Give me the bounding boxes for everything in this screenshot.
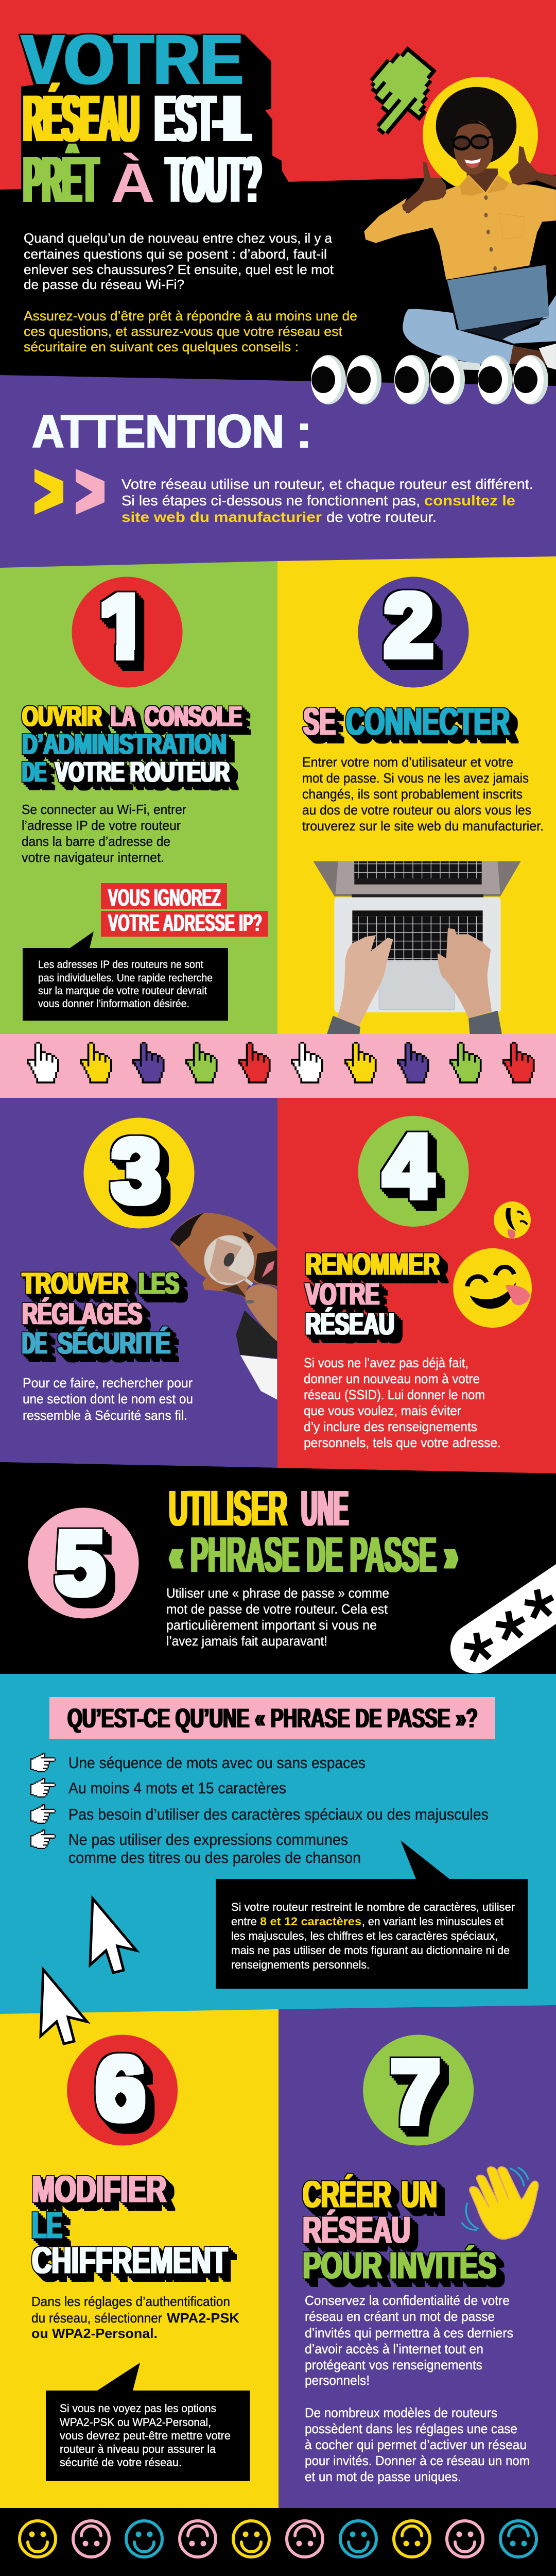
step 5 heading: UTILISER bbox=[169, 1480, 287, 1536]
step 6 text: WPA2-PSK bbox=[167, 2310, 239, 2326]
intro paragraph yellow: sécuritaire en suivant ces quelques conseils : bbox=[24, 339, 299, 354]
panel: step 3 background purple bbox=[0, 1098, 277, 1474]
step 1 text bbox=[22, 802, 186, 865]
title block: EST-IL bbox=[155, 82, 251, 156]
step 7 text bbox=[305, 2293, 530, 2484]
step 3 number badge bbox=[83, 1118, 195, 1228]
step 7 text: d’invités qui permettra à ces derniers bbox=[305, 2325, 513, 2341]
icon: large smiling emoji bbox=[453, 1248, 532, 1328]
step 4 heading: RENOMMER bbox=[305, 1247, 440, 1281]
step 7 heading: RÉSEAU bbox=[303, 2210, 410, 2251]
icon: green pointing hand cursor bbox=[348, 41, 451, 147]
step 1 heading: CONSOLE bbox=[145, 700, 242, 732]
step 2 number badge: 2 bbox=[384, 575, 434, 676]
attention text bbox=[121, 476, 533, 525]
callout: vous ignorez votre adresse IP: VOUS IGNOREZ bbox=[108, 884, 221, 911]
photo: man with magnifying glass bbox=[170, 1213, 277, 1400]
panel: step 7 background purple bbox=[279, 2005, 556, 2508]
list: passphrase rules: Au moins 4 mots et 15 caractères bbox=[68, 1779, 286, 1797]
callout: router restriction speech bubble: Si votre routeur restreint le nombre de caractères, utiliser bbox=[231, 1901, 515, 1913]
title block: TOUT? bbox=[166, 143, 262, 216]
step 7 heading: UN bbox=[402, 2174, 437, 2215]
callout: WPA2 speech bubble: WPA2-PSK ou WPA2-Personal, bbox=[60, 2416, 211, 2429]
callout: WPA2 speech bubble bbox=[46, 2363, 250, 2481]
callout: WPA2 speech bubble: routeur à niveau pour assurer la bbox=[60, 2443, 216, 2455]
step 1 heading: D’ADMINISTRATION bbox=[22, 728, 227, 760]
icon: pointing hands bbox=[30, 1753, 56, 1849]
step 7 heading: CRÉER bbox=[303, 2174, 391, 2215]
title line 3: À bbox=[111, 151, 155, 214]
step 5 text bbox=[166, 1585, 389, 1649]
intro paragraph bbox=[24, 230, 334, 292]
yellow halo bbox=[423, 77, 538, 192]
callout: router restriction speech bubble: renseignements personnels. bbox=[231, 1958, 370, 1971]
step 2 number badge bbox=[358, 575, 468, 687]
icon: arrow cursor one bbox=[90, 1899, 136, 1973]
panel: step 2 background yellow bbox=[277, 556, 556, 1034]
step 7 text: De nombreux modèles de routeurs bbox=[305, 2405, 497, 2420]
step 3 number badge: 3 bbox=[111, 1121, 162, 1222]
callout: WPA2 speech bubble: Si vous ne voyez pas les options bbox=[60, 2402, 216, 2415]
step 7 number badge: 7 bbox=[390, 2042, 441, 2143]
step 4 number badge bbox=[358, 1116, 468, 1227]
step 2 heading: SE bbox=[303, 700, 336, 743]
step 4 number badge: 4 bbox=[383, 1116, 433, 1217]
intro paragraph: de passe du réseau Wi-Fi? bbox=[24, 277, 184, 292]
attention text: Si les étapes ci-dessous ne fonctionnent pas, bbox=[121, 493, 420, 509]
callout: black speech bubble: pas individuelles. Une rapide recherche bbox=[38, 972, 213, 984]
step 5 heading: UNE bbox=[301, 1480, 349, 1536]
step 3 heading: SÉCURITÉ bbox=[58, 1327, 170, 1360]
panel: step 4 background red bbox=[277, 1098, 556, 1479]
intro paragraph yellow bbox=[24, 308, 357, 354]
panel: step 1 background green bbox=[0, 561, 277, 1034]
attention text: consultez le bbox=[424, 493, 515, 509]
step 6 heading: CHIFFREMENT bbox=[32, 2240, 228, 2281]
icon: hand cursor row bbox=[27, 1042, 535, 1083]
step 2 text bbox=[302, 754, 544, 834]
step 1 number badge: 1 bbox=[98, 577, 149, 677]
step 6 text bbox=[31, 2294, 239, 2341]
callout: router restriction speech bubble: entre bbox=[231, 1915, 257, 1928]
callout: router restriction speech bubble: , en variant les minuscules et bbox=[362, 1915, 503, 1928]
callout: vous ignorez votre adresse IP: VOTRE ADRESSE IP? bbox=[108, 909, 262, 936]
step 1 text: votre navigateur internet. bbox=[22, 850, 164, 865]
step 2 text: trouverez sur le site web du manufacturier. bbox=[302, 818, 544, 834]
list: passphrase rules: Ne pas utiliser des expressions communes bbox=[68, 1831, 348, 1849]
intro paragraph: certaines questions qui se posent : d’abord, faut-il bbox=[24, 246, 327, 262]
step 4 text: donner un nouveau nom à votre bbox=[304, 1371, 480, 1386]
step 2 text: au dos de votre routeur ou alors vous les bbox=[302, 802, 531, 818]
step 3 text: une section dont le nom est ou bbox=[23, 1391, 193, 1406]
callout: black speech bubble bbox=[23, 931, 228, 1021]
step 1 heading: OUVRIR bbox=[22, 700, 102, 732]
step 4 heading: RÉSEAU bbox=[305, 1307, 394, 1341]
step 1 heading: LA bbox=[111, 700, 135, 732]
icon: password pill with asterisks bbox=[450, 1564, 556, 1673]
step 1 text: Se connecter au Wi-Fi, entrer bbox=[22, 802, 186, 817]
list: passphrase rules: Une séquence de mots avec ou sans espaces bbox=[68, 1754, 366, 1772]
attention text: site web du manufacturier bbox=[121, 509, 322, 525]
step 6 heading: LE bbox=[32, 2205, 62, 2246]
step 7 text: protégeant vos renseignements bbox=[305, 2357, 482, 2372]
step 2 text: mot de passe. Si vous ne les avez jamais bbox=[302, 770, 529, 786]
photo: woman with laptop giving thumbs up bbox=[364, 77, 556, 370]
step 3 heading: DE bbox=[22, 1327, 47, 1360]
intro paragraph yellow: ces questions, et assurez-vous que votre réseau est bbox=[24, 324, 343, 339]
panel: step 6 background yellow bbox=[0, 2009, 279, 2508]
step 5 text: mot de passe de votre routeur. Cela est bbox=[166, 1601, 388, 1617]
step 7 text: possèdent dans les réglages une case bbox=[305, 2421, 517, 2436]
step 3 text: ressemble à Sécurité sans fil. bbox=[23, 1408, 187, 1423]
step 1 heading bbox=[22, 700, 242, 788]
callout: router restriction speech bubble: les majuscules, les chiffres et les caractères spéciaux, bbox=[231, 1929, 498, 1942]
title line 2: RÉSEAU bbox=[24, 82, 139, 156]
callout: router restriction speech bubble: 8 et 12 caractères bbox=[260, 1915, 361, 1928]
step 7 text: réseau en créant un mot de passe bbox=[305, 2309, 495, 2324]
step 2 text: Entrer votre nom d’utilisateur et votre bbox=[302, 754, 513, 770]
step 6 text: du réseau, sélectionner bbox=[31, 2310, 162, 2326]
panel: step 5 background black bbox=[0, 1462, 556, 1674]
step 2 heading bbox=[303, 700, 510, 743]
icon: waving hand bbox=[462, 2167, 538, 2239]
callout: router restriction speech bubble: mais ne pas utiliser de mots figurant au dictionnaire ni de bbox=[231, 1944, 510, 1957]
step 4 text: réseau (SSID). Lui donner le nom bbox=[304, 1387, 485, 1402]
list: passphrase rules bbox=[30, 1753, 489, 1867]
icon: googly eyes row bbox=[311, 355, 548, 404]
attention text: de votre routeur. bbox=[326, 509, 437, 525]
step 4 heading: VOTRE bbox=[305, 1277, 379, 1311]
callout: vous ignorez votre adresse IP bbox=[101, 883, 268, 937]
icon: double chevrons bbox=[34, 469, 105, 515]
step 3 text: Pour ce faire, rechercher pour bbox=[23, 1375, 193, 1391]
step 3 heading: TROUVER bbox=[22, 1267, 128, 1300]
icon: small winking emoji bbox=[494, 1201, 531, 1239]
callout: WPA2 speech bubble: sécurité de votre réseau. bbox=[60, 2456, 182, 2469]
panel: intro background black bbox=[0, 175, 556, 392]
step 4 text: personnels, tels que votre adresse. bbox=[304, 1435, 501, 1450]
step 7 text: personnels! bbox=[305, 2372, 370, 2388]
step 7 text: d’avoir accès à l’internet tout en bbox=[305, 2341, 483, 2357]
step 1 number badge bbox=[72, 577, 182, 687]
step 6 text: ou WPA2-Personal. bbox=[31, 2326, 158, 2341]
title line 3: PRÊT bbox=[24, 143, 98, 216]
step 4 heading bbox=[305, 1247, 440, 1341]
callout: WPA2 speech bubble: vous devrez peut-être mettre votre bbox=[60, 2429, 231, 2442]
panel: attention background purple bbox=[0, 375, 556, 572]
step 4 text bbox=[304, 1355, 501, 1450]
step 5 text: particulièrement important si vous ne bbox=[166, 1617, 377, 1633]
step 5 text: Utiliser une « phrase de passe » comme bbox=[166, 1585, 389, 1601]
callout: black speech bubble: Les adresses IP des routeurs ne sont bbox=[38, 959, 203, 971]
list: passphrase rules: Pas besoin d’utiliser des caractères spéciaux ou des majuscules bbox=[68, 1805, 489, 1823]
intro paragraph yellow: Assurez-vous d’être prêt à répondre à au moins une de bbox=[24, 308, 357, 324]
step 7 heading bbox=[303, 2174, 496, 2286]
step 3 heading: LES bbox=[138, 1267, 179, 1300]
panel: header background red bbox=[0, 0, 556, 206]
intro paragraph: Quand quelqu’un de nouveau entre chez vous, il y a bbox=[24, 230, 333, 246]
band: black with smiley faces bbox=[0, 2508, 556, 2576]
callout: black speech bubble: vous donner l’information désirée. bbox=[38, 998, 189, 1010]
step 1 heading: DE bbox=[22, 756, 46, 788]
step 5 heading bbox=[169, 1480, 458, 1583]
step 6 number badge: 6 bbox=[95, 2039, 146, 2139]
step 6 number badge bbox=[67, 2035, 178, 2145]
step 3 text bbox=[23, 1375, 193, 1423]
step 5 number badge: 5 bbox=[55, 1513, 106, 1614]
step 6 text: Dans les réglages d’authentification bbox=[31, 2294, 230, 2309]
step 1 heading: VOTRE ROUTEUR bbox=[55, 756, 230, 788]
band: pink with pixel hand cursors bbox=[0, 1034, 556, 1098]
title line 1: VOTRE bbox=[21, 20, 243, 99]
step 4 text: Si vous ne l’avez pas déjà fait, bbox=[304, 1355, 468, 1370]
step 6 heading: MODIFIER bbox=[32, 2169, 166, 2210]
step 3 heading: RÉGLAGES bbox=[22, 1297, 142, 1331]
title extrusion shadow bbox=[19, 35, 289, 202]
step 1 text: dans la barre d’adresse de bbox=[22, 834, 170, 849]
panel overlay: black diagonal edge bbox=[0, 1462, 556, 1494]
step 7 text: pour invités. Donner à ce réseau un nom bbox=[305, 2453, 530, 2468]
step 3 heading bbox=[22, 1267, 179, 1360]
title block bbox=[19, 20, 289, 216]
list: passphrase rules: comme des titres ou des paroles de chanson bbox=[68, 1849, 361, 1867]
panel: passphrase background cyan bbox=[0, 1674, 556, 2016]
step 5 number badge bbox=[28, 1507, 139, 1619]
step 7 number badge bbox=[363, 2035, 474, 2145]
attention text: Votre réseau utilise un routeur, et chaque routeur est différent. bbox=[121, 476, 533, 492]
callout: router restriction speech bubble bbox=[216, 1840, 528, 1989]
step 7 text: Conservez la confidentialité de votre bbox=[305, 2293, 510, 2308]
step 1 text: l’adresse IP de votre routeur bbox=[22, 818, 181, 833]
step 6 heading bbox=[32, 2169, 228, 2281]
step 2 text: changés, ils sont probablement inscrits bbox=[302, 786, 523, 802]
photo: hands typing on laptop bbox=[313, 861, 521, 1034]
step 4 text: que vous voulez, mais éviter bbox=[304, 1403, 461, 1418]
intro paragraph: enlever ses chaussures? Et ensuite, quel est le mot bbox=[24, 262, 334, 277]
step 7 text: à cocher qui permet d’activer un réseau bbox=[305, 2437, 527, 2452]
heading: what is a passphrase bbox=[49, 1697, 495, 1739]
heading: attention: ATTENTION : bbox=[32, 404, 311, 458]
step 4 text: d’y inclure des renseignements bbox=[304, 1419, 477, 1434]
icon: arrow cursor two bbox=[41, 1970, 87, 2044]
step 5 text: l’avez jamais fait auparavant! bbox=[166, 1633, 327, 1649]
callout: black speech bubble: sur la marque de votre routeur devrait bbox=[38, 985, 207, 997]
step 7 text: et un mot de passe uniques. bbox=[305, 2469, 461, 2484]
